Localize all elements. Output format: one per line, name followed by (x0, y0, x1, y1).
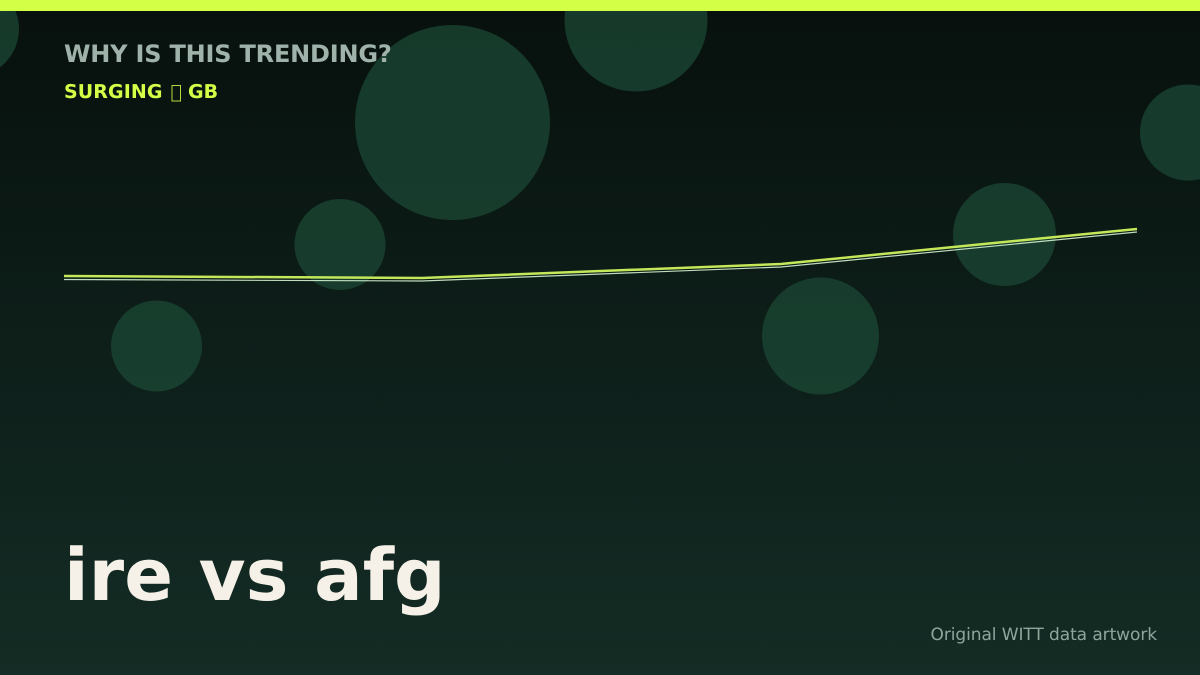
icon: missing glyph box (172, 86, 180, 101)
subheading: surging status: GB (188, 81, 218, 103)
trend line chart (64, 229, 1137, 281)
trend line: secondary (64, 232, 1137, 281)
trend line: primary (64, 229, 1137, 278)
subheading: surging status: SURGING (64, 81, 163, 103)
heading: why is this trending: WHY IS THIS TRENDING? (64, 40, 392, 68)
main title: ire vs afg (64, 533, 446, 617)
subheading: surging status (64, 81, 218, 103)
top accent bar (0, 0, 1200, 11)
credit line: Original WITT data artwork (931, 625, 1157, 645)
bubbles (0, 0, 1200, 394)
